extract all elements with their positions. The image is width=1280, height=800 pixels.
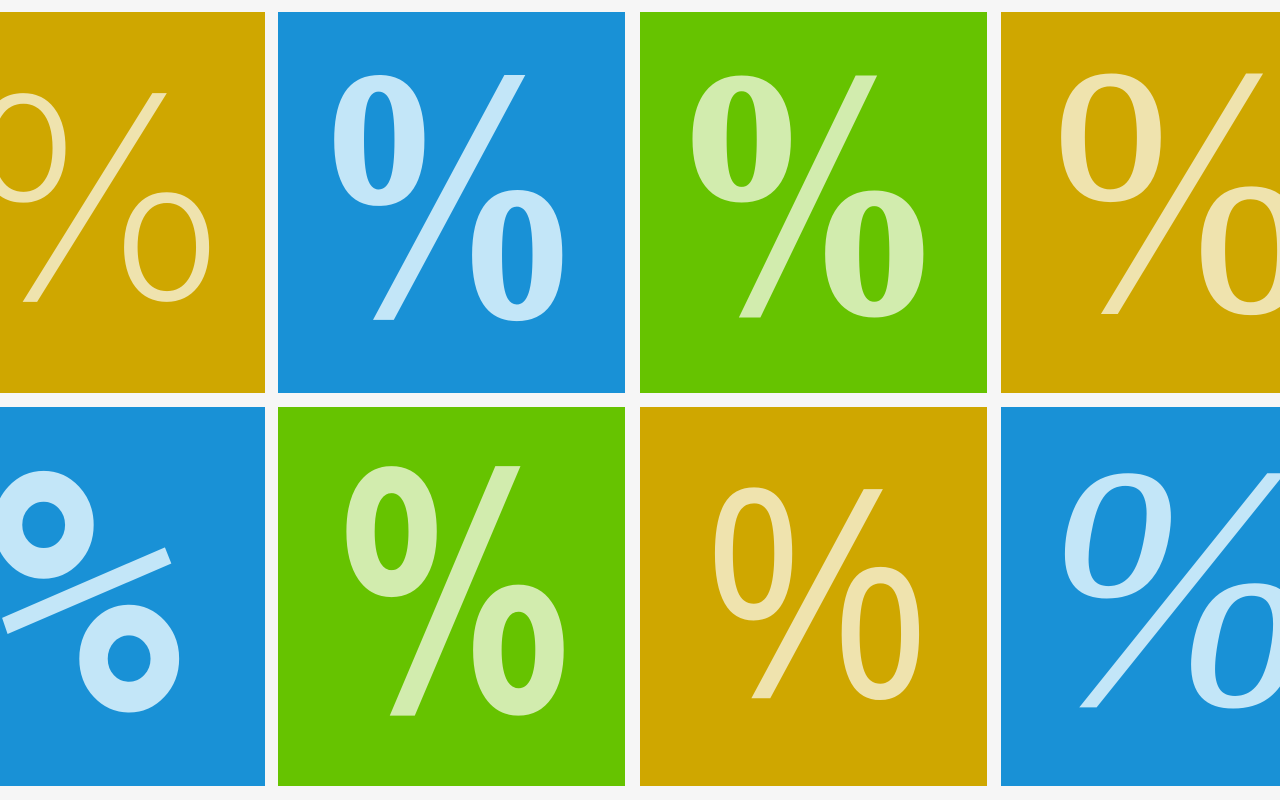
percent glyph: %	[706, 423, 928, 763]
tile 6: green condensed percent	[278, 407, 625, 786]
tile 7: gold split percent	[640, 407, 987, 786]
tile 3: green swash percent	[640, 12, 987, 393]
tile 2: blue engraved percent	[278, 12, 625, 393]
tile 4: gold serif percent	[1001, 12, 1280, 393]
percent glyph: %	[686, 14, 930, 389]
tile 1: gold stencil percent	[0, 12, 265, 393]
tile 5: blue square percent	[0, 407, 265, 786]
tile 8: blue italic percent	[1001, 407, 1280, 786]
percent glyph: %	[339, 407, 571, 786]
